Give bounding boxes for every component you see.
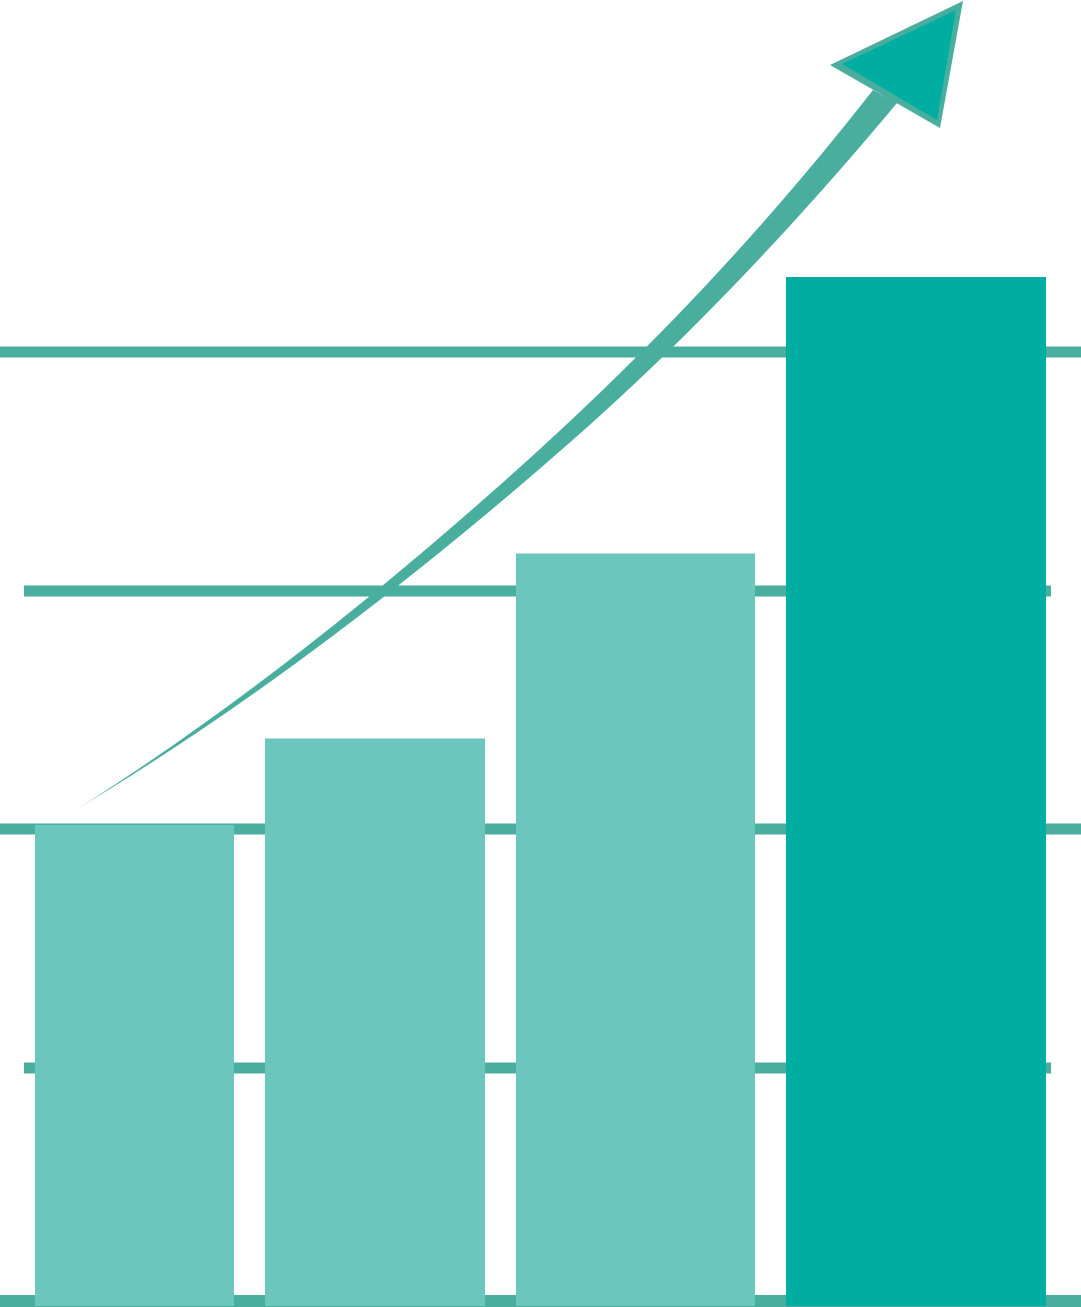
bar 4: [786, 277, 1046, 1306]
growth arrow: [77, 1, 963, 809]
bar 1: [35, 825, 234, 1306]
bar 3: [516, 554, 755, 1306]
bar 2: [265, 738, 485, 1306]
arrow shaft: [77, 90, 897, 809]
arrow head: [830, 1, 963, 128]
